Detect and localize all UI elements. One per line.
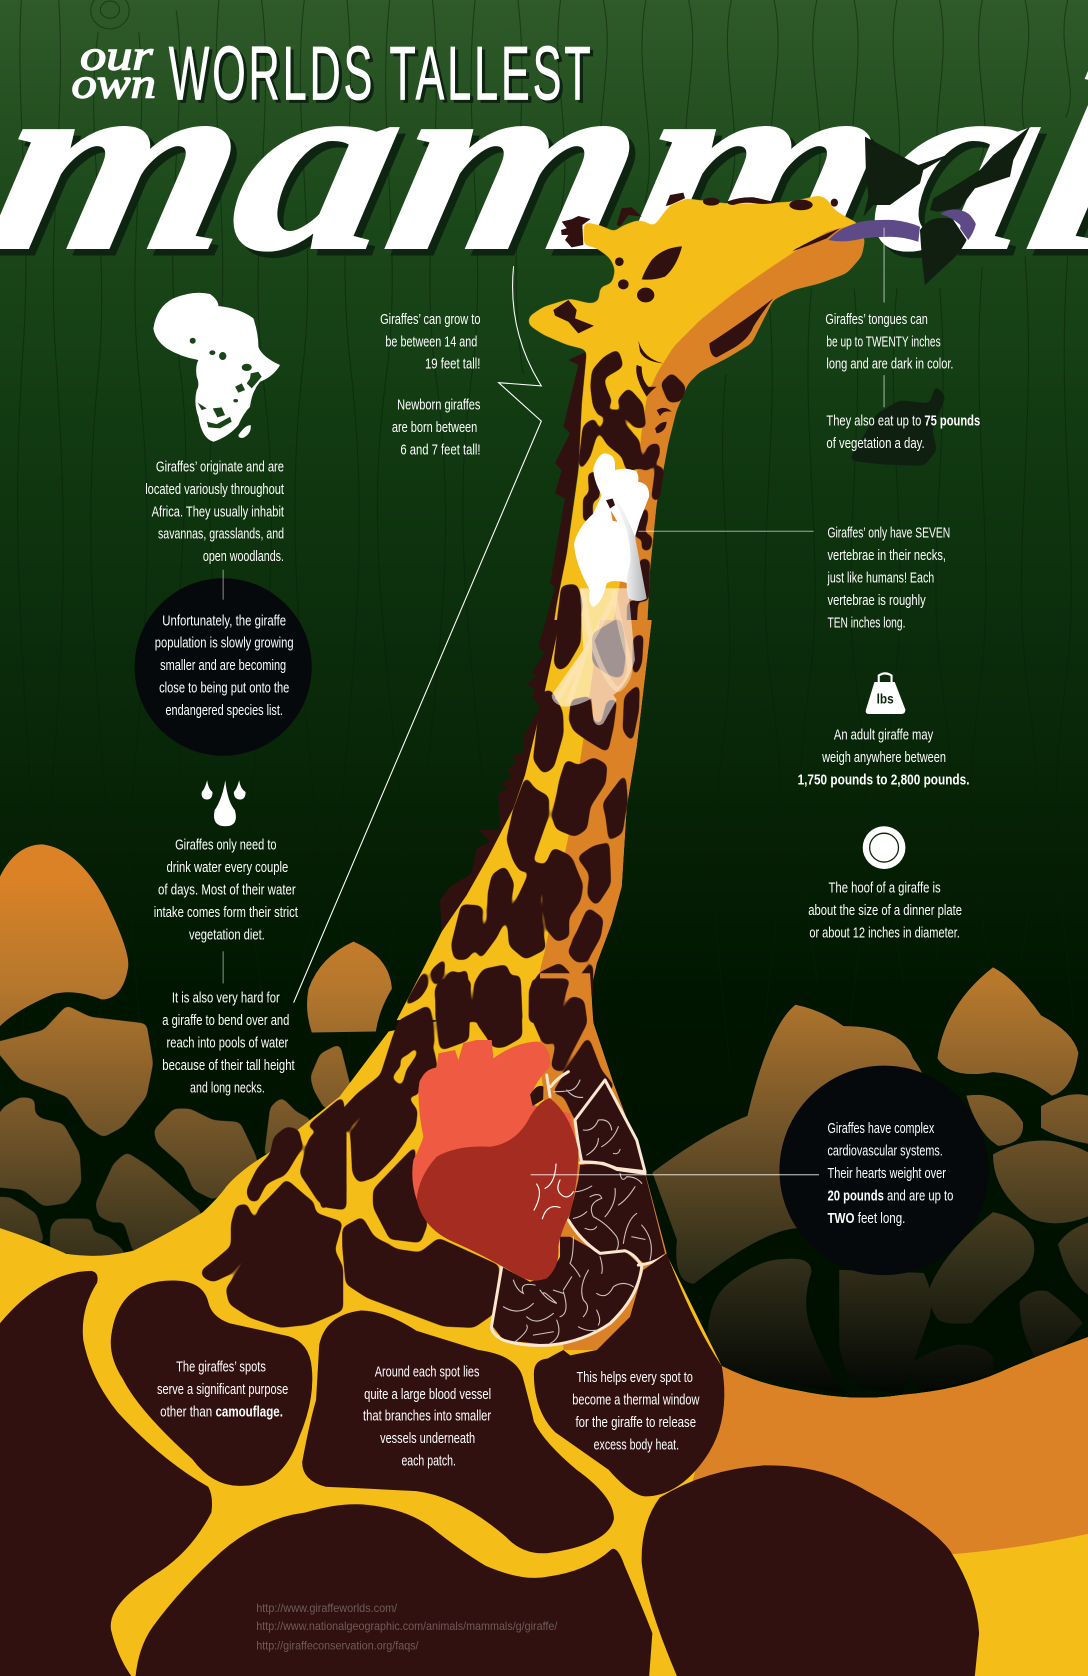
bone: lower translucent [552,588,635,725]
leaves on branch [863,127,1030,285]
leaf: lower [920,218,967,285]
text: hoof: or about 12 inches in diameter. [809,925,960,941]
text: vertebrae: TEN inches long. [827,615,905,631]
text: thermal window: for the giraffe to release [575,1415,696,1431]
giraffe chest spots [320,978,615,1328]
text: source urls: http://giraffeconservation.org/faqs/ [256,1638,419,1652]
text: water: vegetation diet. [189,928,265,944]
callout: endangered: smaller and are becoming [160,658,286,674]
giraffe head orange shading [593,223,865,670]
text: tongue: be up to TWENTY inches [826,334,941,350]
text: origin: Giraffes’ originate and are [156,459,284,475]
giraffe mouth line [792,228,840,252]
text: thermal window: become a thermal window [572,1392,700,1409]
background giraffe spots: right and top left [0,844,1088,1395]
text: thermal window: excess body heat. [594,1437,679,1453]
text: vessels: vessels underneath [380,1431,475,1447]
text: height: Newborn giraffes [397,397,480,413]
text: vessels: Around each spot lies [375,1365,479,1381]
bone: upper white [574,453,649,607]
callout: endangered: Unfortunately, the giraffe [162,613,286,629]
head and upper neck [528,193,865,674]
text: vertebrae [827,526,950,631]
text: vertebrae: vertebrae in their necks, [827,548,946,564]
text: water: Giraffes only need to [175,838,277,854]
text: source urls: http://www.giraffeworlds.com/ [256,1601,398,1615]
callout: heart [779,1066,989,1275]
text: origin: located variously throughout [145,482,284,498]
text: hoof: about the size of a dinner plate [808,903,962,919]
callout: endangered [135,578,312,756]
icon: weight: lbs [877,690,894,706]
text: height: are born between [392,420,477,436]
giraffe neck spots [401,610,644,1023]
text: vessels: each patch. [401,1453,456,1469]
giraffe upper neck spots [553,348,687,674]
text: hoof [808,881,962,941]
text: vegetation [826,413,980,452]
text: origin: savannas, grasslands, and [158,527,284,543]
leaf: upper [863,137,952,217]
text: height: 6 and 7 feet tall! [400,442,480,458]
text: vessels [363,1365,491,1469]
icon: weight [866,673,905,714]
arrow: height bracket line [294,266,541,1003]
text: water: of days. Most of their water [158,883,296,899]
text: weight: 1,750 pounds to 2,800 pounds. [798,773,969,789]
callout: heart: cardiovascular systems. [827,1143,943,1159]
text: bending: reach into pools of water [167,1035,288,1052]
title: worlds tallest: WORLDS TALLEST [169,31,594,116]
text: weight: weigh anywhere between [821,750,946,766]
icon: heart [412,1040,578,1281]
text: height: 19 feet tall! [425,357,480,373]
leaf shadow behind text [848,383,946,466]
giraffe orange rump [683,1337,1088,1555]
text: origin: open woodlands. [203,549,284,565]
text: vessels: that branches into smaller [363,1409,491,1425]
callout: heart: 20 pounds and are up to [827,1188,953,1204]
giraffe face markings [553,197,813,433]
text: height: be between 14 and [385,334,477,350]
text: tongue: long and are dark in color. [826,357,953,373]
giraffe neck orange shading [537,620,652,1020]
leaf: right band [930,127,1030,212]
text: source urls [256,1601,558,1652]
heart area [320,973,667,1350]
title: our own: own [72,60,156,107]
title: our own: our [80,32,153,79]
text: vessels: quite a large blood vessel [364,1387,491,1403]
text: bending: It is also very hard for [172,991,280,1007]
giraffe horn tufts [561,193,838,250]
text: vertebrae: vertebrae is roughly [827,593,926,609]
text: bending: a giraffe to bend over and [162,1013,289,1029]
callout: heart: TWO feet long. [827,1211,905,1227]
giraffe head fill [528,195,865,670]
text: vegetation: They also eat up to 75 pounds [826,413,980,429]
text: spots: The giraffes’ spots [176,1359,266,1375]
callout: endangered: close to being put onto the [159,681,289,697]
giraffe lower body spots [201,1095,347,1328]
text: origin [145,459,284,565]
text: water [154,838,298,944]
giraffe mane upper [537,350,595,670]
giraffe body [0,989,1088,1676]
text: height: Giraffes’ can grow to [380,312,480,328]
text: height [380,312,480,458]
text: vertebrae: just like humans! Each [827,571,934,587]
giraffe chest orange shading [540,973,667,1350]
text: bending [162,991,295,1096]
mid neck [397,610,652,1023]
text: weight [798,728,969,789]
text: thermal window [572,1370,700,1453]
title: worlds tallest [169,31,597,120]
icon: plate [863,826,905,869]
text: source urls: http://www.nationalgeographic.com/animals/mammals/g/giraffe/ [256,1619,558,1633]
icon: vertebrae bones [552,453,649,725]
text: bending: because of their tall height [162,1058,295,1074]
text: tongue [825,312,953,373]
text: spots: serve a significant purpose [157,1382,288,1398]
text: tongue: Giraffes’ tongues can [825,312,928,328]
callout: endangered: endangered species list. [165,703,283,719]
icon: water drops [202,780,246,826]
text: vegetation: of vegetation a day. [826,436,925,452]
title: mammal: mammal [0,27,1088,311]
giraffe neck fill [397,620,652,1020]
callout: endangered: population is slowly growing [155,636,294,652]
text: hoof: The hoof of a giraffe is [829,881,941,897]
title: our own [72,32,156,107]
background giraffe spots: lower left [0,1005,353,1260]
giraffe mane lower [440,620,563,932]
text: weight: An adult giraffe may [834,728,934,744]
title: worlds tallest: WORLDS TALLEST [172,35,597,120]
callout: heart: Giraffes have complex [827,1121,935,1137]
text: water: intake comes form their strict [154,905,298,921]
text: water: drink water every couple [167,860,288,876]
icon: Africa map [153,293,280,442]
text: origin: Africa. They usually inhabit [152,504,284,520]
text: thermal window: This helps every spot to [577,1370,693,1386]
text: spots [157,1359,288,1420]
text: bending: and long necks. [190,1080,265,1096]
icon: tongue [828,209,976,242]
callout: heart: Their hearts weight over [827,1166,946,1182]
text: spots: other than camouflage. [160,1404,283,1420]
blood vessel patches [492,1072,665,1345]
text: vertebrae: Giraffes’ only have SEVEN [827,526,950,542]
